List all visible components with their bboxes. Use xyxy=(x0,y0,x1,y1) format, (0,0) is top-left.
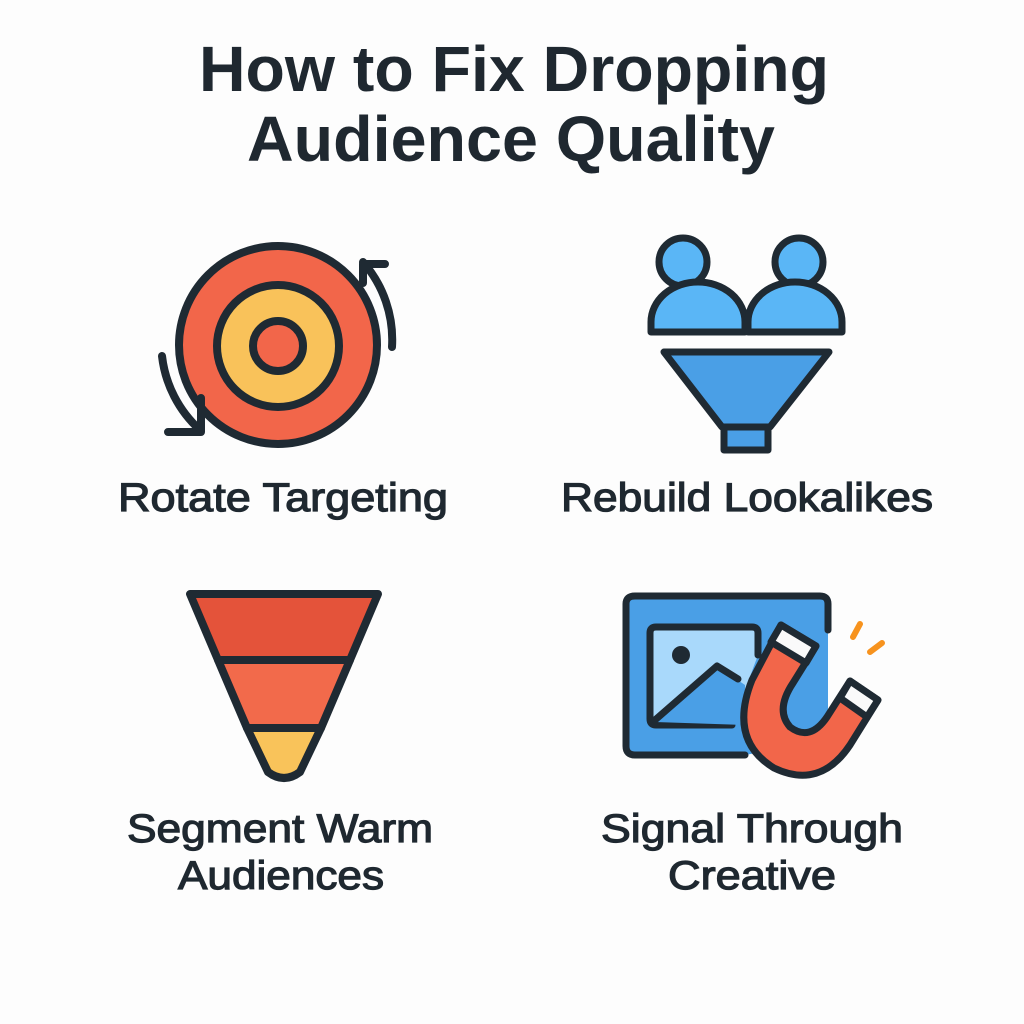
label: Signal Through Creative xyxy=(601,807,903,898)
label: Rotate Targeting: Rotate Targeting xyxy=(118,476,448,520)
title xyxy=(199,33,829,175)
title: How to Fix Dropping xyxy=(199,33,829,105)
label: Segment Warm Audiences: Segment Warm xyxy=(127,807,433,851)
label: Segment Warm Audiences xyxy=(127,807,433,898)
label: Signal Through Creative: Signal Through xyxy=(601,807,903,851)
title: Audience Quality xyxy=(247,103,775,175)
label: Segment Warm Audiences: Audiences xyxy=(178,854,384,898)
icon: rotating target xyxy=(162,246,392,444)
label: Rebuild Lookalikes: Rebuild Lookalikes xyxy=(561,476,933,520)
icon: people over funnel xyxy=(651,238,842,450)
icon: segmented funnel xyxy=(190,594,378,778)
label: Signal Through Creative: Creative xyxy=(668,854,836,898)
icon: creative with magnet xyxy=(626,596,882,775)
